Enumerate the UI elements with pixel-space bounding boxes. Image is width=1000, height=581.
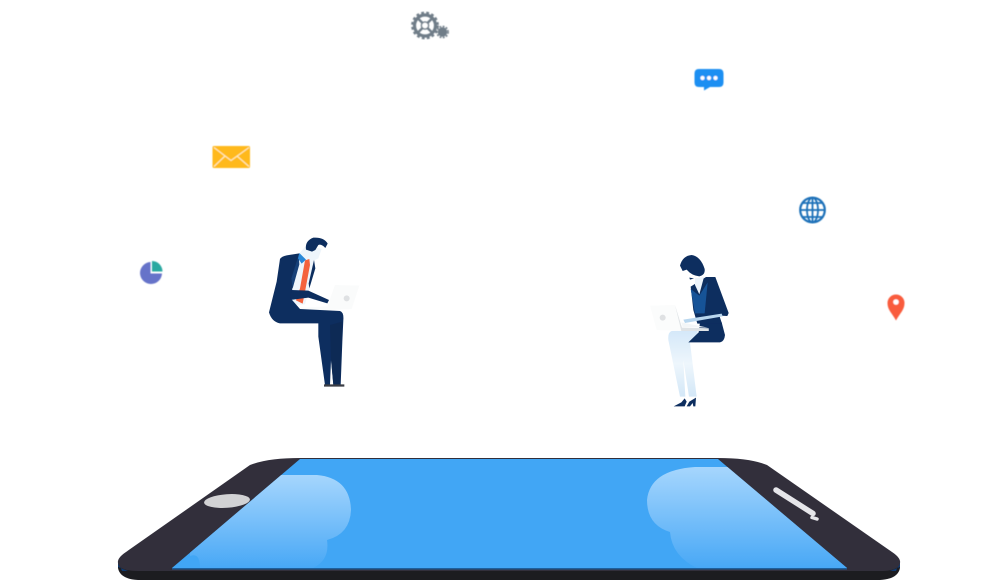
speaker slot [776, 490, 813, 514]
jacket lapel [291, 255, 299, 288]
phone body [118, 458, 900, 571]
high heels [674, 398, 696, 406]
legs [668, 330, 699, 397]
icon: globe [800, 198, 825, 222]
laptop [650, 305, 709, 331]
icon: gears [412, 13, 448, 38]
clouds on screen [172, 467, 860, 568]
blue blouse panel [691, 282, 708, 313]
hair [306, 238, 328, 252]
screen bottom line [172, 568, 847, 570]
blue collar [298, 253, 306, 264]
face and shirt [291, 245, 322, 305]
laptop behind arm [299, 285, 359, 311]
arm [290, 290, 329, 303]
skirt [688, 322, 725, 342]
shoes [324, 384, 344, 387]
screen [172, 459, 847, 568]
left cloud [190, 475, 351, 568]
neck accent [689, 278, 694, 280]
right lapel [309, 260, 315, 288]
suit jacket and trousers [269, 253, 343, 385]
left cloud notch [172, 555, 200, 568]
forearm [683, 314, 723, 323]
white neckline [695, 277, 704, 294]
icon: chat bubble [694, 69, 724, 90]
jacket [691, 277, 729, 324]
icon: envelope [212, 146, 250, 168]
hair [680, 255, 705, 276]
sensor dot [812, 518, 817, 519]
left side accent [118, 562, 128, 571]
right side accent [890, 562, 900, 571]
icon: pie chart [140, 261, 162, 284]
right cloud [647, 467, 860, 568]
illustration scene [118, 11, 906, 580]
phone bottom edge [118, 562, 900, 580]
home button [204, 493, 250, 509]
figure: businesswoman with laptop [650, 255, 729, 406]
phone [118, 458, 900, 580]
orange tie [296, 259, 310, 304]
icon: map pin [888, 294, 904, 320]
figure: businessman with laptop [269, 238, 359, 387]
